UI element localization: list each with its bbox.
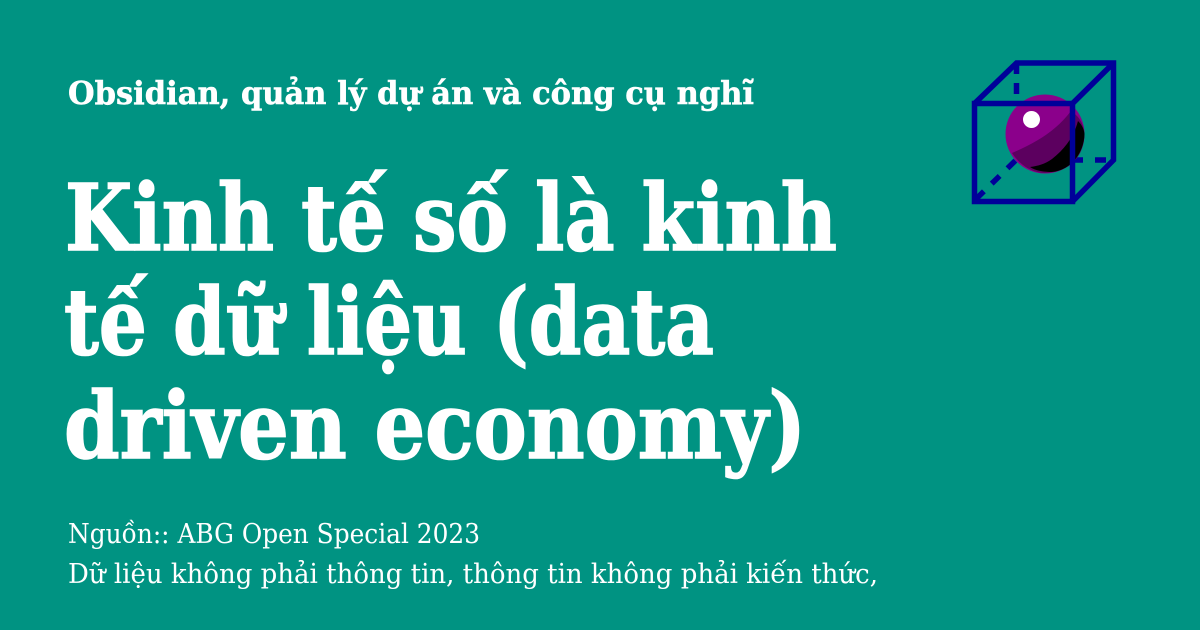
title (64, 164, 837, 480)
subheading: Obsidian, quản lý dự án và công cụ nghĩ (68, 74, 754, 112)
icon: sphere in wireframe cube (974, 63, 1114, 202)
sphere (1006, 94, 1084, 174)
title: driven economy) (64, 372, 806, 480)
title: Kinh tế số là kinh (65, 164, 837, 272)
source and description text: Dữ liệu không phải thông tin, thông tin không phải kiến thức, (68, 558, 878, 590)
cube hidden edges (976, 63, 1114, 199)
cube solid edges (974, 63, 1114, 202)
source and description text (68, 519, 878, 590)
title: tế dữ liệu (data (64, 268, 714, 376)
source and description text: Nguồn:: ABG Open Special 2023 (68, 519, 480, 550)
